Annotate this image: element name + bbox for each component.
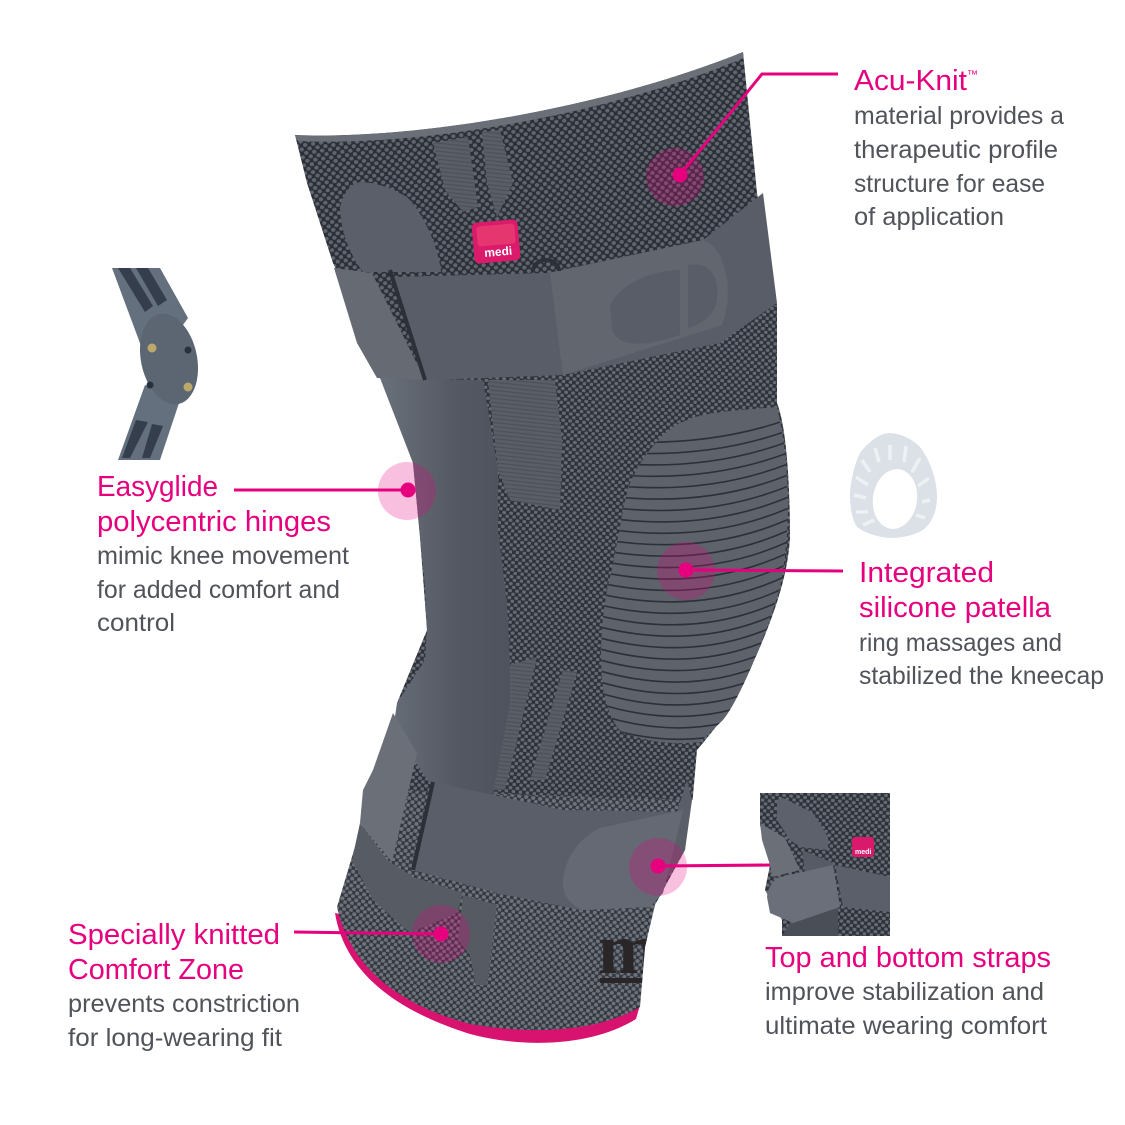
leader line — [234, 488, 408, 492]
strap photo back band — [760, 823, 800, 877]
brace: lower knit — [337, 791, 686, 1030]
brace: medi label — [471, 219, 521, 264]
hotspot dot — [400, 482, 416, 498]
strap photo label: medi — [855, 849, 871, 856]
hotspot dot — [650, 858, 666, 874]
inset: hinge photo — [112, 268, 206, 460]
brace: upper buckle ring — [390, 270, 425, 380]
hinge screws — [146, 344, 192, 392]
strap photo tab — [767, 865, 840, 923]
heading — [68, 919, 280, 986]
heading: silicone patella — [859, 592, 1052, 624]
body text — [859, 629, 1104, 690]
heading: Top and bottom straps — [765, 942, 1051, 974]
callout: Top and bottom straps — [629, 838, 1051, 1040]
hotspot halo — [646, 148, 704, 206]
hotspot halo — [629, 838, 687, 896]
callout: Comfort Zone — [68, 905, 470, 1052]
brace: lower strap — [413, 780, 692, 910]
hinge disc — [132, 308, 206, 410]
inset: strap photo — [760, 793, 890, 936]
brace: medi label: medi — [484, 244, 513, 260]
strap photo lower band — [782, 905, 838, 936]
body text: improve stabilization and — [765, 978, 1044, 1006]
heading: polycentric hinges — [97, 506, 331, 538]
ring ridges — [854, 445, 930, 525]
leader line — [680, 74, 838, 175]
brace: upper strap — [392, 193, 777, 380]
leader line — [294, 932, 441, 934]
body text: therapeutic profile — [854, 136, 1058, 164]
brace: lower seam band — [458, 895, 497, 985]
brace: knitted m logo: m — [598, 909, 658, 989]
ring body — [850, 433, 937, 538]
hinge upper arm — [112, 268, 188, 370]
knee brace product — [280, 40, 810, 1043]
trademark: ™ — [967, 69, 978, 81]
heading: Acu-Knit — [854, 65, 967, 97]
body text: structure for ease — [854, 170, 1045, 198]
body text: for added comfort and — [97, 576, 340, 604]
heading — [97, 471, 331, 538]
brace: patella ribbed zone — [601, 407, 788, 744]
hotspot halo — [412, 905, 470, 963]
body text — [765, 978, 1047, 1040]
brace: upper strap tab — [550, 240, 728, 375]
strap photo pad — [777, 798, 828, 850]
hotspot dot — [672, 168, 688, 182]
heading: Integrated — [859, 557, 994, 589]
brace: upper knit — [295, 52, 777, 364]
brace: hinge pad — [380, 378, 510, 795]
body text: material provides a — [854, 102, 1064, 130]
brace: top rim — [295, 52, 744, 142]
body text: control — [97, 609, 175, 637]
strap photo label — [852, 837, 874, 857]
heading: Comfort Zone — [68, 954, 244, 986]
brace: upper seam bands — [433, 130, 513, 217]
brace: upper tab ovals — [610, 264, 717, 344]
brace: lower buckle ring — [413, 782, 433, 870]
leader line — [686, 570, 843, 571]
heading: Easyglide — [97, 471, 218, 503]
hinge lower arm slots — [122, 420, 163, 458]
brace: centre seam bands — [488, 380, 562, 510]
body text — [97, 542, 349, 637]
hotspot halo — [378, 462, 436, 520]
strap photo background — [760, 793, 890, 936]
body text — [68, 990, 300, 1052]
body text — [854, 102, 1064, 231]
brace: lower strap tab — [563, 810, 683, 910]
hotspot dot — [434, 926, 448, 942]
brace: pink hem — [335, 913, 640, 1043]
hotspot halo — [657, 542, 715, 600]
brace: upper eyelet — [533, 260, 559, 271]
body text: ring massages and — [859, 629, 1062, 657]
heading: Specially knitted — [68, 919, 280, 951]
hinge upper arm slots — [118, 268, 167, 312]
leader line — [658, 865, 770, 866]
ring hole — [869, 466, 921, 532]
brace: upper left strap — [334, 268, 425, 380]
heading — [859, 557, 1052, 624]
callout: Integrated patella — [657, 542, 1104, 690]
body text: prevents constriction — [68, 990, 300, 1018]
strap photo band — [835, 865, 890, 912]
inset: silicone patella ring — [850, 433, 937, 538]
brace: top-left pad — [340, 182, 441, 272]
body text: of application — [854, 203, 1004, 231]
body text: stabilized the kneecap — [859, 662, 1104, 690]
body text: ultimate wearing comfort — [765, 1012, 1047, 1040]
body text: mimic knee movement — [97, 542, 349, 570]
brace: lower left strap — [360, 713, 417, 862]
brace: knitted m logo — [600, 939, 647, 983]
strap photo buckle piece — [802, 850, 833, 872]
body text: for long-wearing fit — [68, 1024, 282, 1052]
brace: middle knit — [380, 300, 810, 800]
callout: Acu-Knit — [646, 65, 1064, 231]
hinge lower arm — [118, 385, 180, 460]
brace: lower hinge bump — [352, 823, 463, 933]
callout: Easyglide hinges — [97, 462, 436, 637]
hotspot dot — [678, 562, 694, 578]
